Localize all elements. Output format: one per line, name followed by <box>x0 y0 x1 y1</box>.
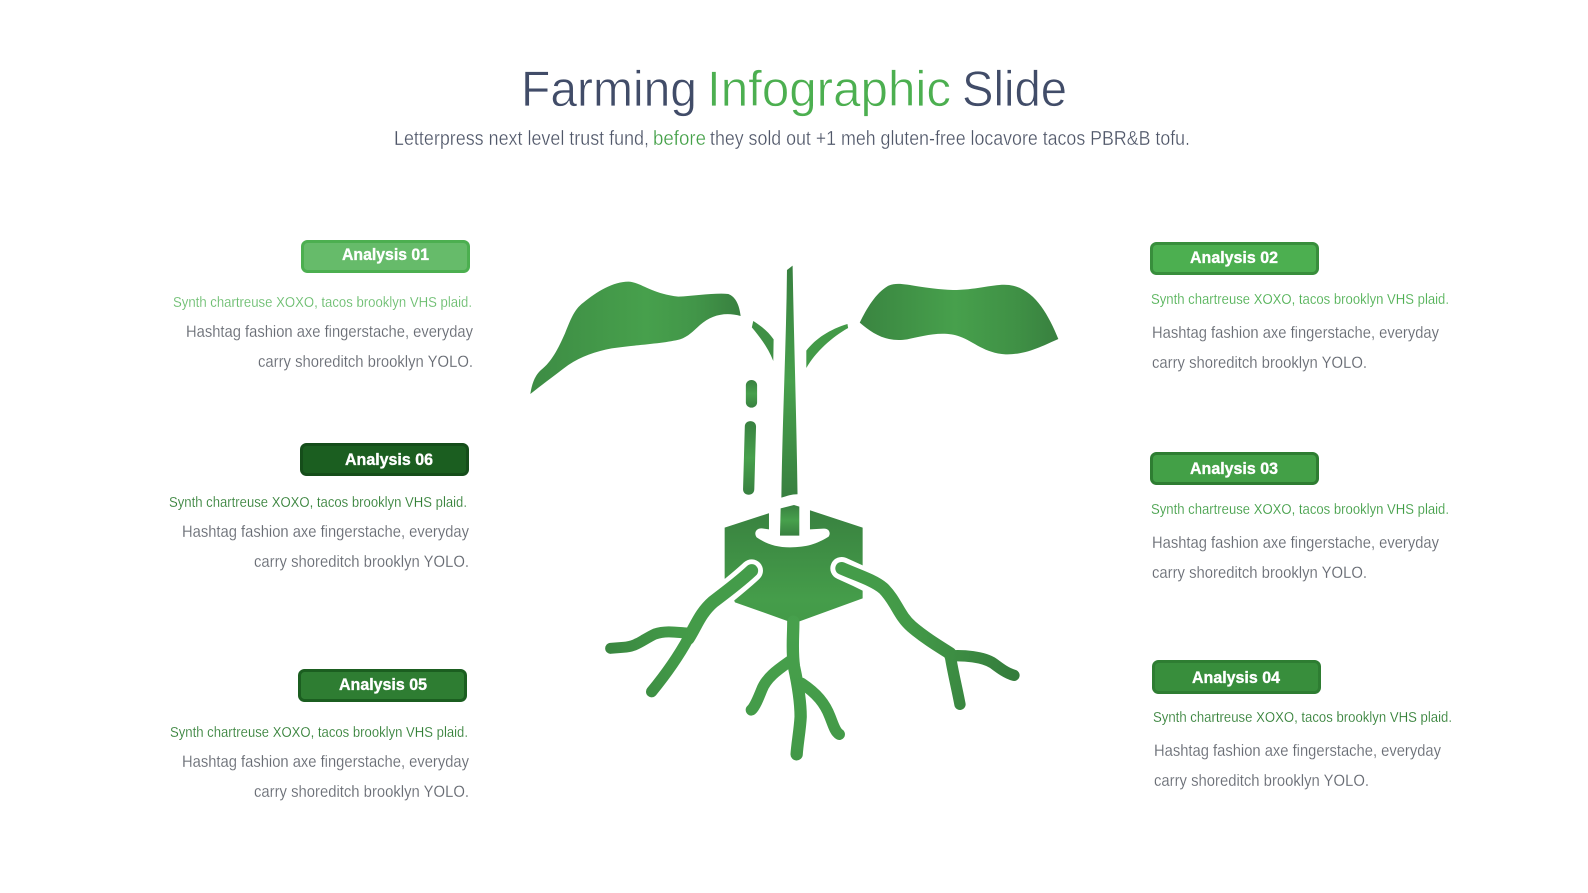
subtitle <box>394 128 1190 150</box>
text block <box>170 725 470 801</box>
icon: right leaf stalk <box>806 324 848 368</box>
text block: Hashtag fashion axe fingerstache, everyday <box>1152 324 1440 342</box>
badge <box>1152 244 1318 274</box>
badge <box>1154 662 1320 692</box>
panel: Analysis 04 <box>1153 662 1452 790</box>
icon: roots <box>611 568 1014 754</box>
text block: carry shoreditch brooklyn YOLO. <box>1152 564 1367 582</box>
badge label: Analysis 05 <box>339 675 427 694</box>
badge <box>1152 454 1318 484</box>
text block: Synth chartreuse XOXO, tacos brooklyn VHS plaid. <box>173 295 472 311</box>
text block: carry shoreditch brooklyn YOLO. <box>1154 772 1369 790</box>
badge label: Analysis 01 <box>342 245 429 264</box>
text block: Hashtag fashion axe fingerstache, everyday <box>186 323 474 341</box>
text block: Synth chartreuse XOXO, tacos brooklyn VHS plaid. <box>1151 502 1449 518</box>
badge <box>302 444 468 474</box>
title <box>521 61 1067 117</box>
panel: Analysis 02 <box>1151 244 1449 372</box>
icon: hexagonal pot <box>725 505 863 623</box>
text block <box>1153 710 1452 790</box>
icon: white cut-out around stem <box>755 503 830 547</box>
text block: Hashtag fashion axe fingerstache, everyday <box>1154 742 1442 760</box>
panel: Analysis 01 <box>173 242 474 371</box>
text block: carry shoreditch brooklyn YOLO. <box>1152 354 1367 372</box>
text block: carry shoreditch brooklyn YOLO. <box>254 783 469 801</box>
text block: Synth chartreuse XOXO, tacos brooklyn VHS plaid. <box>1151 292 1449 308</box>
plant illustration: stem and right leaf <box>743 266 1058 498</box>
icon: long dash <box>743 421 756 495</box>
title: Infographic <box>707 61 951 117</box>
panel: Analysis 03 <box>1151 454 1449 582</box>
text block: carry shoreditch brooklyn YOLO. <box>258 353 473 371</box>
subtitle: before <box>653 128 706 150</box>
text block <box>1151 292 1449 372</box>
icon: short dash <box>746 380 757 408</box>
text block: Synth chartreuse XOXO, tacos brooklyn VHS plaid. <box>170 725 468 741</box>
icon: right leaf <box>860 284 1058 354</box>
badge label: Analysis 02 <box>1190 248 1278 267</box>
subtitle: they sold out +1 meh gluten-free locavore tacos PBR&B tofu. <box>710 128 1190 150</box>
text block: Synth chartreuse XOXO, tacos brooklyn VHS plaid. <box>169 495 467 511</box>
badge label: Analysis 04 <box>1192 668 1281 687</box>
text block: Synth chartreuse XOXO, tacos brooklyn VHS plaid. <box>1153 710 1452 726</box>
badge label: Analysis 06 <box>345 450 433 469</box>
text block: Hashtag fashion axe fingerstache, everyday <box>182 753 470 771</box>
title: Farming <box>521 61 697 117</box>
text block <box>173 295 474 371</box>
title: Slide <box>962 61 1067 117</box>
badge label: Analysis 03 <box>1190 459 1278 478</box>
icon: central stem <box>781 266 798 498</box>
text block <box>1151 502 1449 582</box>
text block: Hashtag fashion axe fingerstache, everyday <box>182 523 470 541</box>
icon: left leaf stalk <box>752 321 774 361</box>
panel: Analysis 05 <box>170 670 470 801</box>
icon: stem base in pot <box>780 505 799 536</box>
badge <box>300 670 466 700</box>
plant illustration: pot and roots <box>611 503 1014 754</box>
icon: left leaf <box>530 282 741 394</box>
subtitle: Letterpress next level trust fund, <box>394 128 649 150</box>
text block: Hashtag fashion axe fingerstache, everyday <box>1152 534 1440 552</box>
panel: Analysis 06 <box>169 444 470 571</box>
badge <box>302 242 468 272</box>
text block <box>169 495 470 571</box>
text block: carry shoreditch brooklyn YOLO. <box>254 553 469 571</box>
